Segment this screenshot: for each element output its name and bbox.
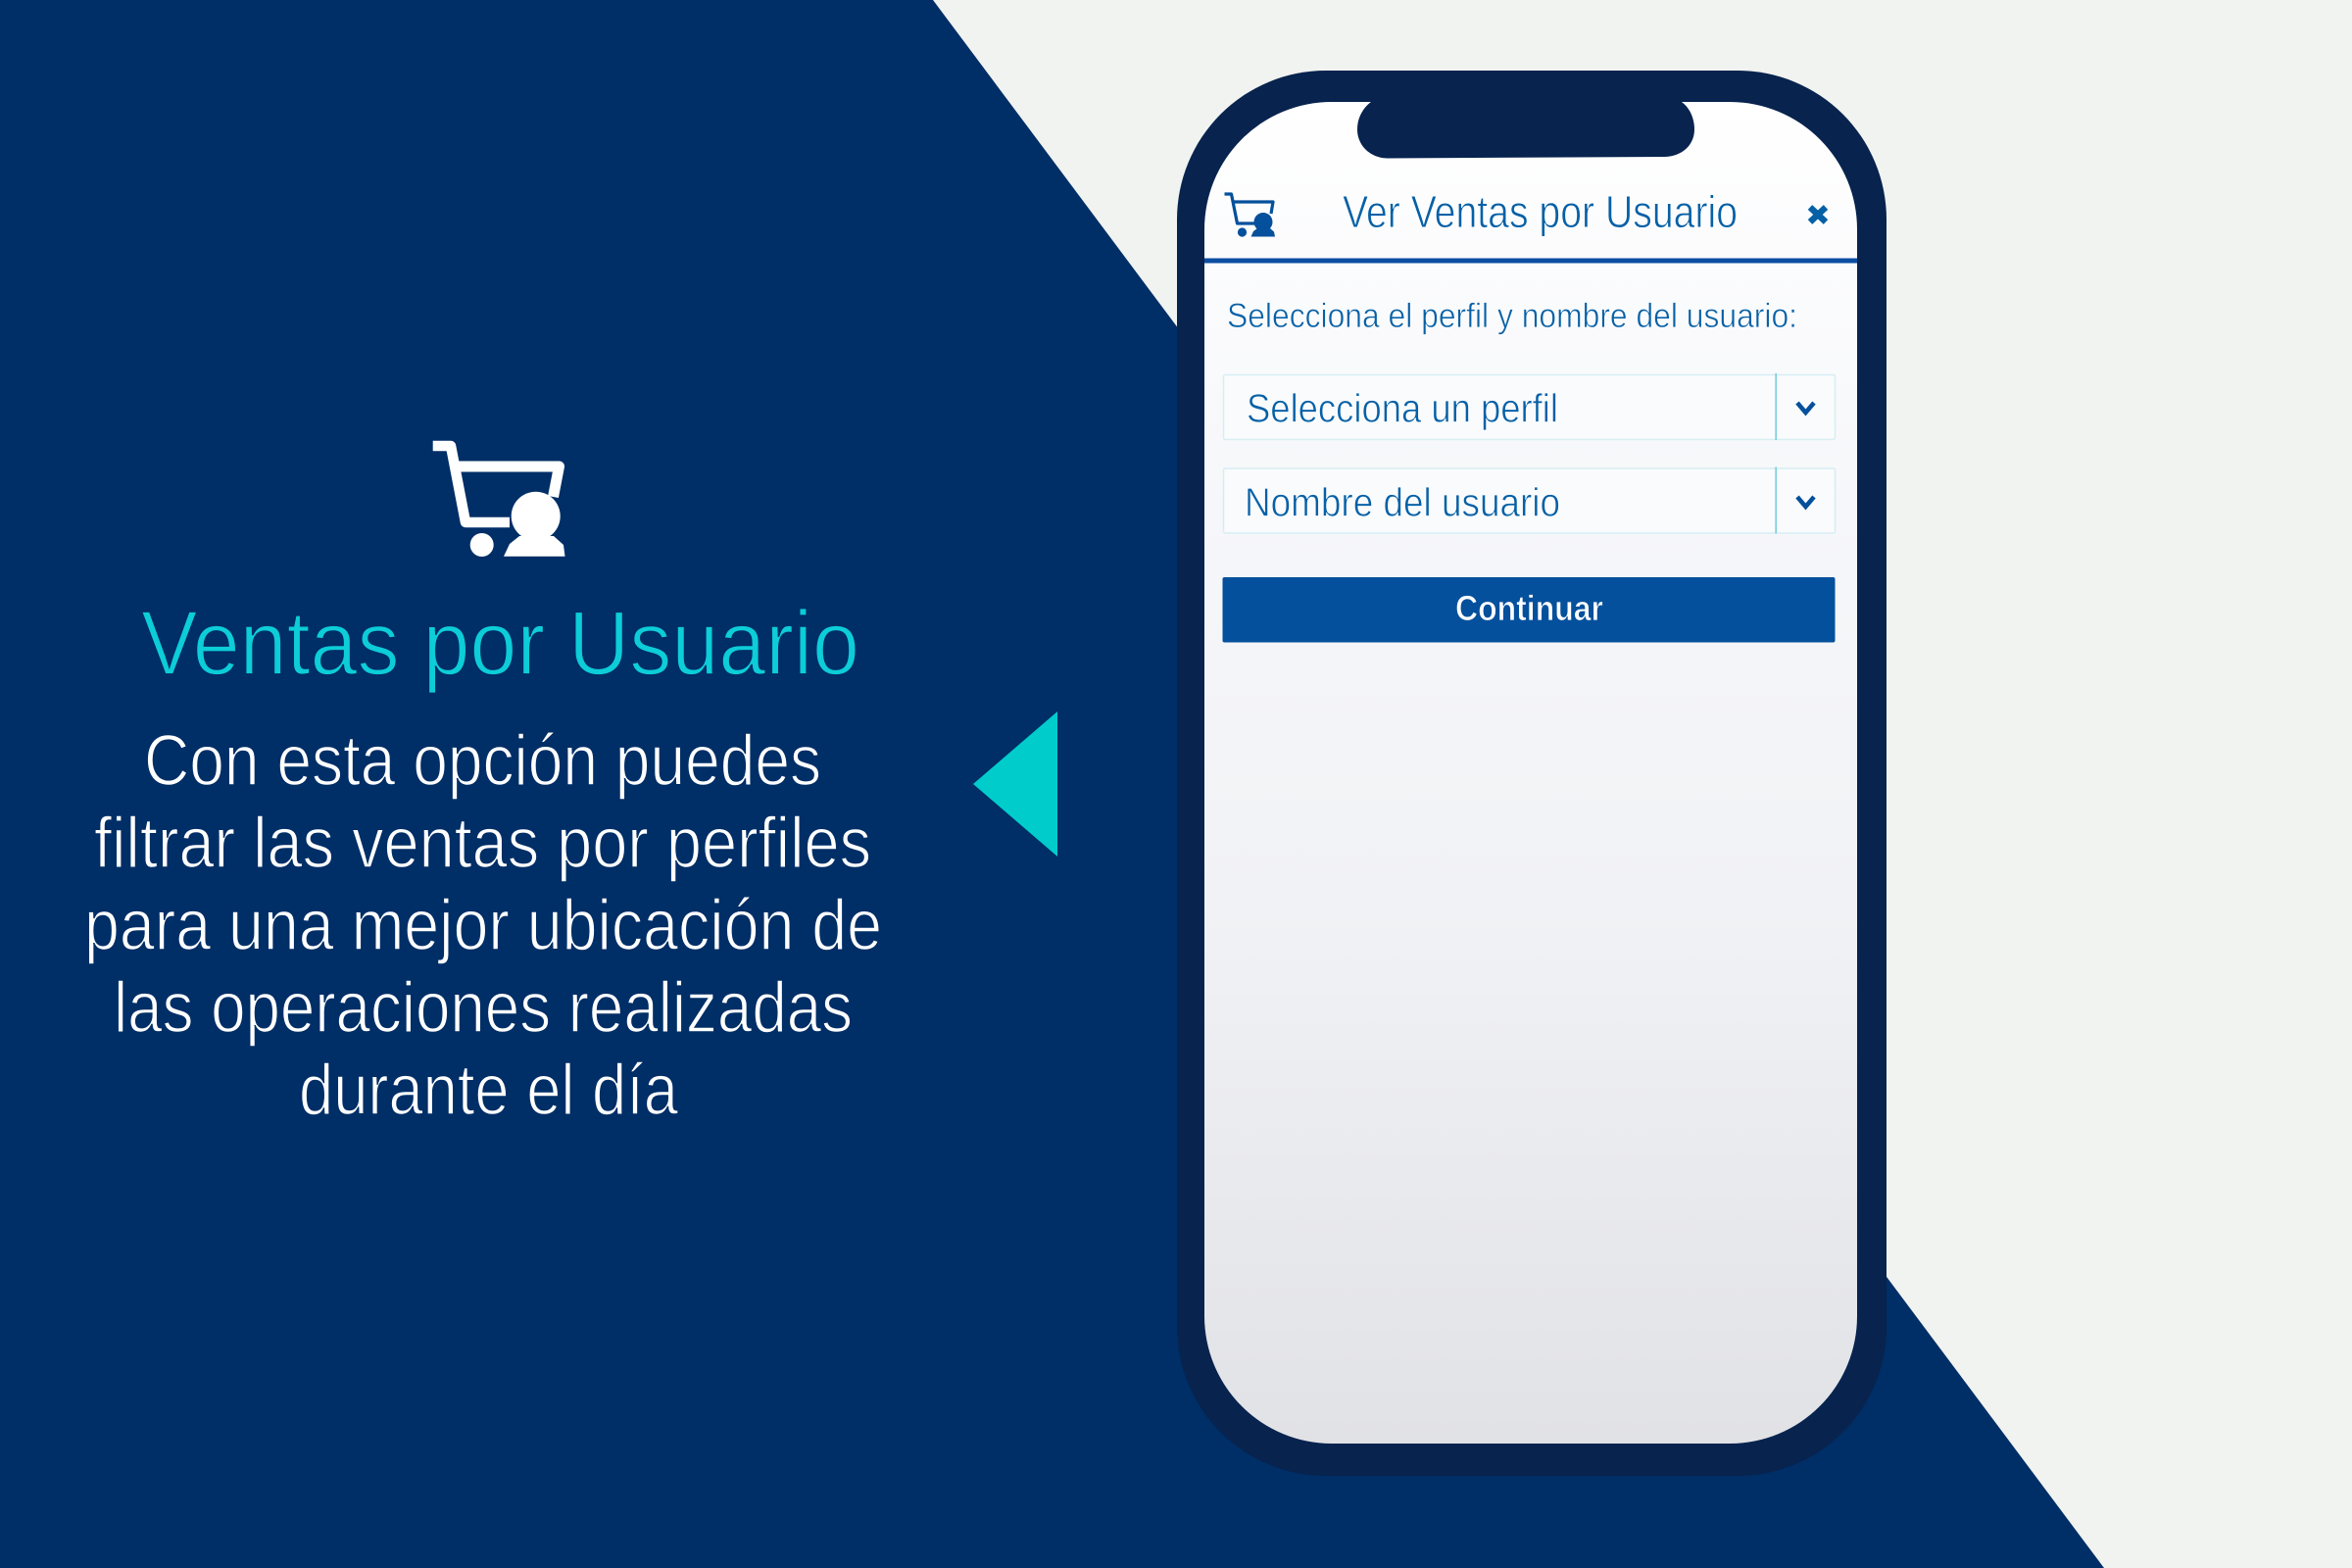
icon: shopping cart with user [433, 446, 564, 557]
description text: para una mejor ubicación de [84, 886, 882, 965]
title: Ventas por Usuario [141, 592, 859, 694]
header: title: Ver Ventas por Usuario [1343, 186, 1738, 237]
phone screen [1204, 102, 1857, 1444]
button: continuar [1223, 577, 1835, 643]
button: continuar: Continuar [1455, 588, 1603, 628]
phone notch [1357, 102, 1694, 159]
header: close icon [1810, 208, 1826, 221]
form instruction: Selecciona el perfil y nombre del usuario: [1227, 296, 1797, 335]
description text: durante el día [299, 1051, 678, 1130]
description text: Con esta opción puedes [144, 721, 821, 801]
dropdown: perfil: Selecciona un perfil [1247, 386, 1558, 431]
phone frame [1177, 71, 1886, 1476]
description text [84, 721, 882, 1130]
dropdown: usuario [1223, 466, 1835, 533]
phone [1177, 71, 1886, 1476]
description text: las operaciones realizadas [114, 968, 853, 1048]
arrow: teal triangle pointing to phone [973, 711, 1057, 857]
description text: filtrar las ventas por perfiles [94, 804, 871, 883]
header divider [1204, 259, 1857, 263]
dropdown: usuario: Nombre del usuario [1245, 480, 1560, 525]
header: small cart icon [1225, 194, 1275, 237]
dropdown: perfil [1223, 373, 1835, 440]
